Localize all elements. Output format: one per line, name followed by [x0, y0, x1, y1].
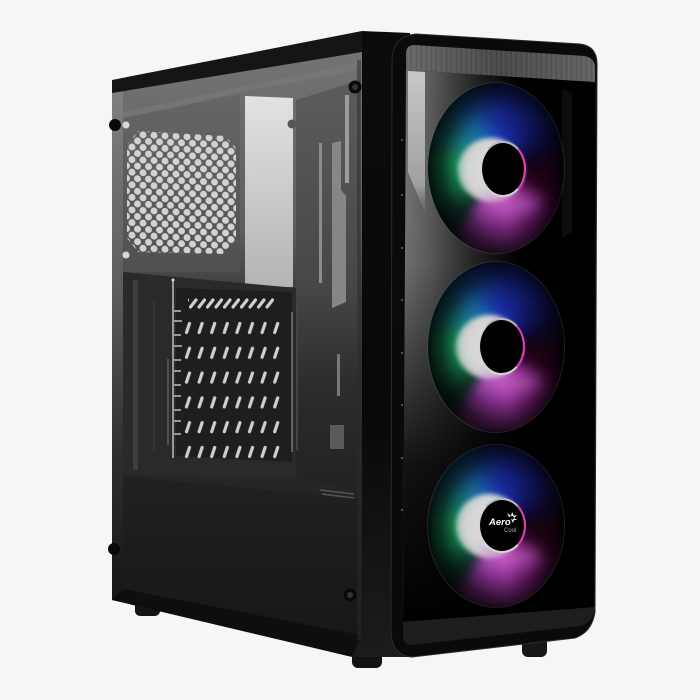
screws [108, 80, 362, 602]
side glass panel [112, 31, 362, 657]
brushed top band [406, 45, 595, 82]
front corner pillar [352, 31, 410, 657]
upper top rail [123, 62, 360, 120]
left panel edge [112, 89, 123, 600]
motherboard tray [123, 272, 296, 478]
light rectangular opening [245, 96, 293, 287]
case feet [135, 598, 547, 668]
slot grid [182, 316, 283, 465]
fan: bottom with logo [428, 445, 564, 607]
bottom rail [112, 589, 360, 657]
cable tie line [168, 280, 292, 458]
hub with logo [478, 498, 526, 553]
chassis plate [123, 94, 240, 272]
icon: leaf [507, 512, 517, 523]
PSU shroud [123, 476, 360, 635]
top slot row [188, 295, 274, 311]
glass fade [403, 70, 595, 622]
fan: top [428, 83, 564, 253]
right dark reflection [562, 90, 572, 238]
glass reflection strip [408, 71, 425, 213]
bottom band [403, 607, 595, 645]
outer bezel [391, 34, 597, 657]
logo word: Aero [489, 517, 511, 528]
top black rail [112, 31, 362, 93]
fan: middle [428, 262, 564, 432]
left bezel dots [401, 139, 403, 511]
honeycomb ventilation [127, 131, 236, 254]
logo sub word: Cool [504, 528, 516, 534]
glass sheen [403, 70, 595, 622]
right internal chassis [296, 80, 360, 498]
glass [403, 70, 595, 622]
front panel [391, 34, 597, 657]
light mounting dots [122, 122, 174, 282]
inner edge of side [357, 60, 361, 640]
